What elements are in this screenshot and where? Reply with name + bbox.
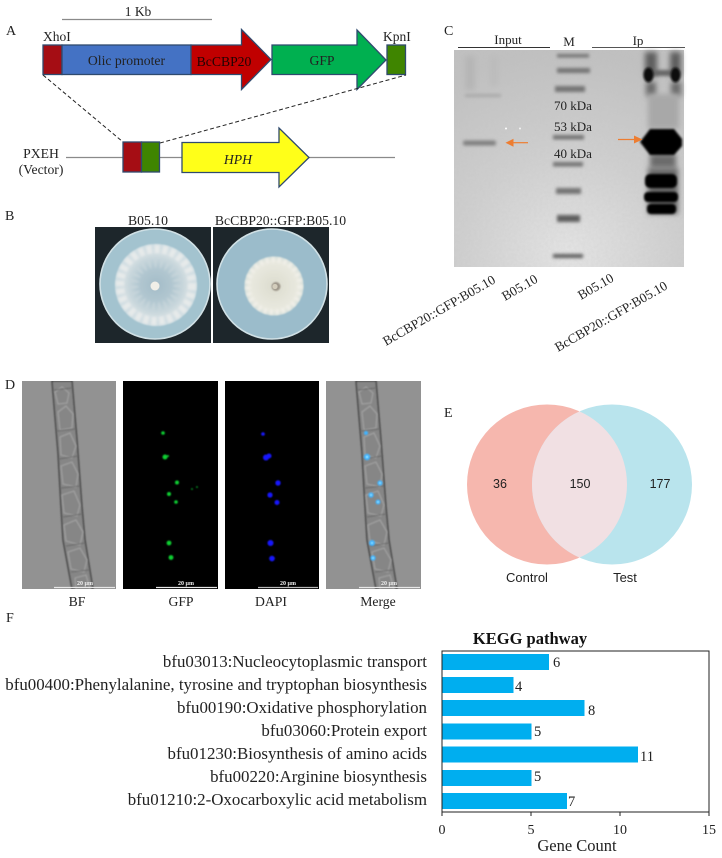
bar chart: Gene Count [537,836,617,855]
panel F: KEGG pathway [5,611,716,855]
Ip lane bands [640,52,682,214]
pathway labels: bfu01210:2-Oxocarboxylic acid metabolism [128,790,427,809]
panel B: culture plates [5,209,346,343]
pathway labels: bfu00220:Arginine biosynthesis [210,767,427,786]
panel letter D: D [5,378,15,393]
HPH arrow [182,128,309,187]
merge micrograph: 20 µm [381,581,397,587]
BF micrograph: 20 µm [77,581,93,587]
vector green box [142,142,160,172]
panel letter B: B [5,209,14,224]
panel letter F: F [6,611,14,626]
Input header: Input [494,32,522,47]
Test label: Test [613,570,637,585]
Olic promoter block: Olic promoter [88,53,166,68]
Olic promoter block [62,45,191,74]
dashed zoom lines [43,75,406,143]
chart title: KEGG pathway [473,629,588,648]
Control set circle [467,404,627,564]
KpnI green box [387,45,406,74]
count 150: 150 [570,477,590,491]
orange arrow Ip [618,136,642,144]
marker size labels [554,98,592,161]
panel E: Venn diagram [444,404,692,585]
bar chart: 5 [528,823,534,838]
bar chart: 11 [640,749,654,765]
pathway labels: bfu00190:Oxidative phosphorylation [177,698,428,717]
BF micrograph [22,381,116,589]
BcCBP20 arrow: BcCBP20 [197,54,252,69]
XhoI site label: XhoI [43,29,71,44]
panel letter A: A [6,24,17,39]
DAPI micrograph: 20 µm [280,581,296,587]
M header: M [563,34,575,49]
bar chart: 0 [438,823,446,838]
bar chart [438,651,716,855]
Ip header: Ip [633,33,643,48]
bar chart: 10 [613,823,627,838]
pathway labels: bfu00400:Phenylalanine, tyrosine and tryptophan biosynthesis [5,675,427,694]
KpnI site label: KpnI [383,29,411,44]
lane label 3: B05.10 [575,270,616,303]
plate label B05.10: B05.10 [128,213,168,228]
BcCBP20 arrow [191,30,271,90]
bar chart: 5 [534,769,541,785]
input lane bands [463,56,521,146]
bar chart: 6 [553,655,560,671]
marker size labels: 70 kDa [554,98,592,113]
Control label: Control [506,570,548,585]
pathway labels [5,652,428,809]
micrograph captions [69,594,396,609]
marker size labels: 40 kDa [554,146,592,161]
panel letter E: E [444,406,453,421]
pathway labels: bfu03013:Nucleocytoplasmic transport [163,652,427,671]
bar chart: 15 [702,823,716,838]
bar chart: 8 [588,703,595,719]
GFP micrograph: 20 µm [178,581,194,587]
vector label: (Vector) [19,162,63,178]
vector red box [123,142,142,172]
panel D: microscopy [5,378,421,609]
GFP arrow [272,30,386,90]
micrograph captions: DAPI [255,594,287,609]
plate photo: BcCBP20::GFP:B05.10 [213,227,329,343]
bar chart: 5 [534,724,541,740]
pathway labels: bfu01230:Biosynthesis of amino acids [168,744,427,763]
pathway labels: bfu03060:Protein export [261,721,427,740]
bar chart: 4 [515,679,523,695]
micrograph captions: BF [69,594,86,609]
lane label 2: B05.10 [499,271,540,304]
vector label [19,146,63,178]
DAPI micrograph [225,381,319,589]
blot image [454,50,684,267]
panel A: gene construct diagram [6,4,411,187]
marker size labels: 53 kDa [554,119,592,134]
Input header [458,32,550,48]
scale bar 1 Kb: 1 Kb [125,4,152,19]
merge micrograph [326,381,421,589]
Test set circle [532,404,692,564]
HPH arrow: HPH [223,152,253,167]
plate photo: B05.10 [95,227,211,343]
panel C: western blot [380,24,685,355]
vector backbone line [66,156,395,158]
XhoI red box [43,45,62,74]
panel letter C: C [444,24,453,39]
count 36: 36 [493,477,507,491]
GFP micrograph [123,381,218,589]
overlap region [532,411,627,558]
bar chart: 7 [568,794,575,810]
micrograph captions: GFP [168,594,194,609]
count 177: 177 [650,477,670,491]
micrograph captions: Merge [360,594,396,609]
lane label 1: BcCBP20::GFP:B05.10 [380,272,498,349]
orange arrow input [506,139,528,147]
plate label BcCBP20::GFP:B05.10: BcCBP20::GFP:B05.10 [215,213,346,228]
vector label: PXEH [23,146,59,161]
lane label 4: BcCBP20::GFP:B05.10 [552,278,670,355]
Ip header [592,33,685,48]
marker lane bands [553,54,590,258]
GFP arrow: GFP [309,53,335,68]
